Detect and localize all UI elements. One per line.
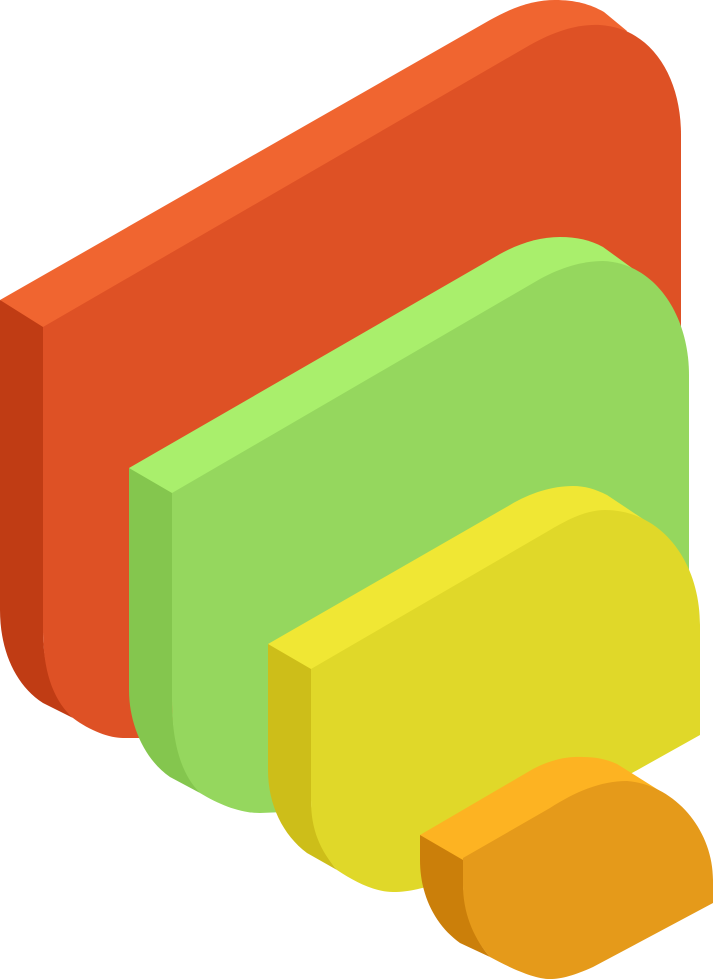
orange front face [463,781,713,979]
panel: orange [420,757,713,979]
green side face [129,468,200,793]
yellow side face [268,644,337,870]
orange side face [420,835,490,957]
green top face [129,237,632,505]
red top face [0,0,627,340]
panel: green [129,237,689,813]
orange top face [420,757,660,870]
panel: red [0,0,681,738]
yellow top face [268,486,643,680]
yellow front face [311,510,700,892]
red side face [0,300,73,718]
red front face [43,25,681,738]
green front face [172,261,689,813]
panel: yellow [268,486,700,892]
